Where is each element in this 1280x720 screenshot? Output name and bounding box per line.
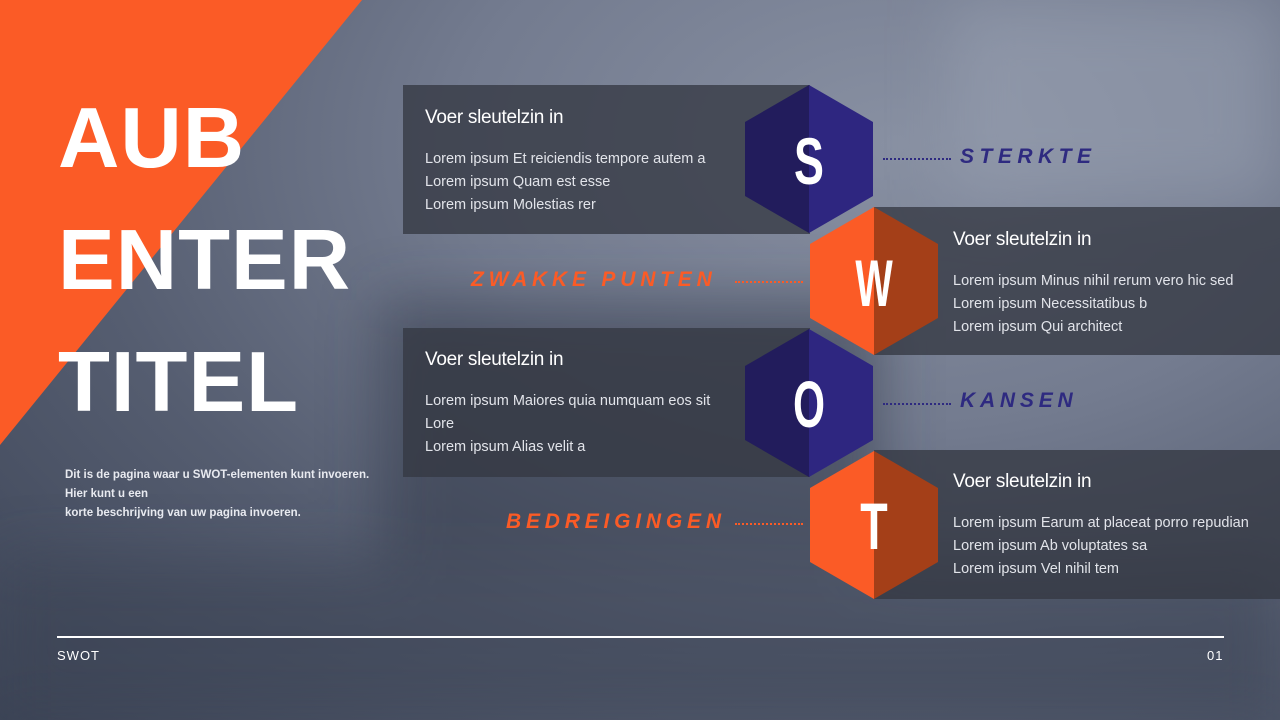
panel: threats text: Lorem ipsum Ab voluptates sa [953,538,1147,554]
description: Dit is de pagina waar u SWOT-elementen kunt invoeren. [65,469,369,481]
title: AUB [58,91,245,186]
label: sterkte: STERKTE [960,145,1097,168]
panel: strengths text [403,85,810,234]
connector: zwakke punten [735,281,803,283]
hexagon W: W [855,247,893,321]
title: ENTER [58,213,351,308]
label: bedreigingen: BEDREIGINGEN [506,510,726,533]
panel: strengths text: Lorem ipsum Molestias rer [425,197,596,213]
panel: weaknesses text: Voer sleutelzin in [953,229,1091,250]
panel: strengths text: Lorem ipsum Quam est esse [425,174,610,190]
panel: opportunities text: Lore [425,416,454,432]
description: korte beschrijving van uw pagina invoeren. [65,507,301,519]
panel: opportunities text: Voer sleutelzin in [425,349,563,370]
hexagon O [745,329,873,477]
panel: threats text [874,450,1280,599]
footer line [57,636,1224,638]
footer right: page number: 01 [1207,648,1223,663]
label: zwakke punten: ZWAKKE PUNTEN [471,268,717,291]
panel: threats text: Lorem ipsum Vel nihil tem [953,561,1119,577]
panel: weaknesses text [874,207,1280,355]
footer left: SWOT: SWOT [57,648,100,663]
label: kansen: KANSEN [960,389,1077,412]
title [58,91,351,430]
hexagon W [810,207,938,355]
panel: strengths text: Lorem ipsum Et reiciendis tempore autem a [425,151,705,167]
panel: threats text: Voer sleutelzin in [953,471,1091,492]
connector: bedreigingen [735,523,803,525]
panel: strengths text: Voer sleutelzin in [425,107,563,128]
orange triangle [0,0,362,445]
hexagon T: T [860,489,888,563]
title: TITEL [58,335,299,430]
connector: kansen [883,403,951,405]
panel: opportunities text [403,328,810,477]
hexagon S [745,85,873,233]
panel: weaknesses text: Lorem ipsum Qui architect [953,319,1122,335]
hexagon S: S [794,124,824,198]
description [65,469,369,519]
hexagon T [810,451,938,599]
panel: opportunities text: Lorem ipsum Alias velit a [425,439,585,455]
panel: threats text: Lorem ipsum Earum at placeat porro repudian [953,515,1249,531]
connector: sterkte [883,158,951,160]
description: Hier kunt u een [65,488,148,500]
hexagon O: O [793,367,825,441]
panel: weaknesses text: Lorem ipsum Necessitatibus b [953,296,1147,312]
panel: opportunities text: Lorem ipsum Maiores quia numquam eos sit [425,393,710,409]
panel: weaknesses text: Lorem ipsum Minus nihil rerum vero hic sed [953,273,1233,289]
